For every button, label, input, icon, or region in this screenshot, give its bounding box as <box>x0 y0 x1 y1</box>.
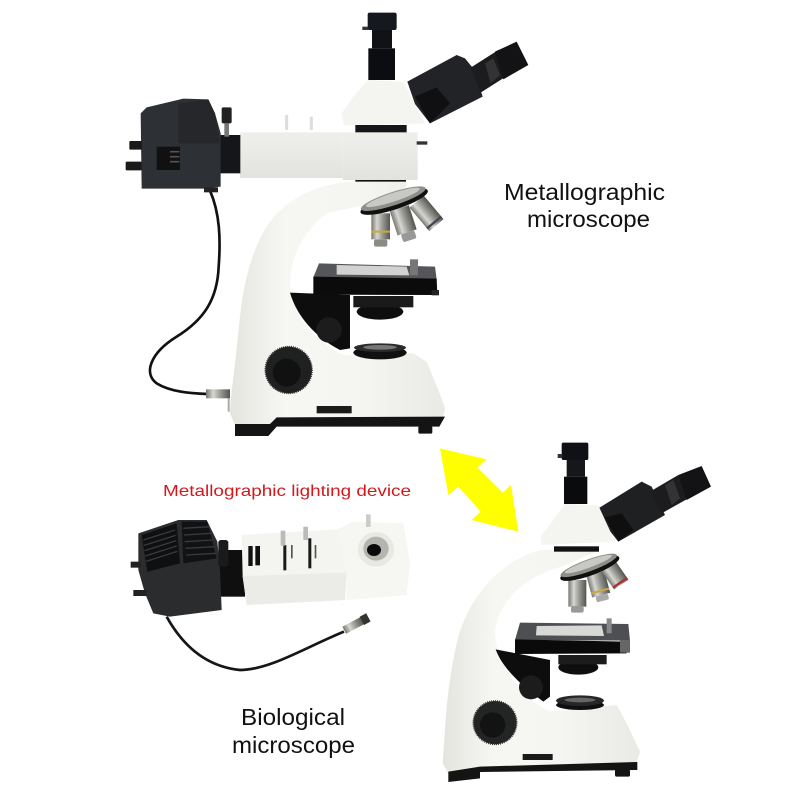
nosepiece <box>358 181 430 220</box>
lens ring <box>556 695 604 710</box>
label: Metallographic lighting device: Metallographic lighting device <box>163 483 411 500</box>
objectives <box>371 196 444 247</box>
lamp tube <box>218 135 240 173</box>
microscope arm and base <box>230 182 445 425</box>
lamp house <box>126 99 232 192</box>
lens ring <box>353 343 407 359</box>
illuminator housing <box>240 115 427 180</box>
stage mount <box>290 293 350 350</box>
nosepiece <box>557 549 622 586</box>
camera tube <box>558 443 588 504</box>
stage mount <box>496 649 550 702</box>
nameplate <box>523 754 553 760</box>
focus knob <box>473 701 517 744</box>
trinocular head <box>342 80 425 125</box>
eyepiece <box>598 466 711 542</box>
label: Biological microscope <box>232 704 355 758</box>
condenser <box>558 655 607 675</box>
metallographic microscope photo <box>126 13 528 436</box>
condenser <box>353 296 413 320</box>
white body <box>242 514 410 605</box>
label: Metallographic microscope: Metallographic <box>504 179 665 205</box>
device cable <box>167 617 344 670</box>
stage <box>515 618 630 654</box>
yellow double arrow <box>440 448 518 532</box>
trinocular head <box>541 504 615 545</box>
connector <box>206 389 230 412</box>
eyepiece <box>407 42 528 123</box>
collars <box>355 125 407 183</box>
camera tube <box>362 13 397 80</box>
objectives <box>568 561 628 613</box>
label: Metallographic microscope <box>504 179 665 232</box>
biological microscope photo <box>443 443 711 782</box>
lamp tube <box>218 550 245 597</box>
nameplate <box>317 406 352 413</box>
label: Biological microscope: Biological <box>241 704 345 730</box>
label: Biological microscope: microscope <box>232 732 355 758</box>
cable connector <box>342 613 371 634</box>
lamp housing <box>131 520 228 617</box>
collar <box>554 546 599 552</box>
base black underside <box>235 417 445 436</box>
focus knob <box>265 347 312 393</box>
microscope arm and base <box>443 550 640 773</box>
base black underside <box>448 762 637 782</box>
cable from lamp to connector <box>150 191 220 394</box>
stage <box>313 259 439 295</box>
lighting device photo <box>131 514 410 670</box>
label: Metallographic microscope: microscope <box>527 206 650 232</box>
